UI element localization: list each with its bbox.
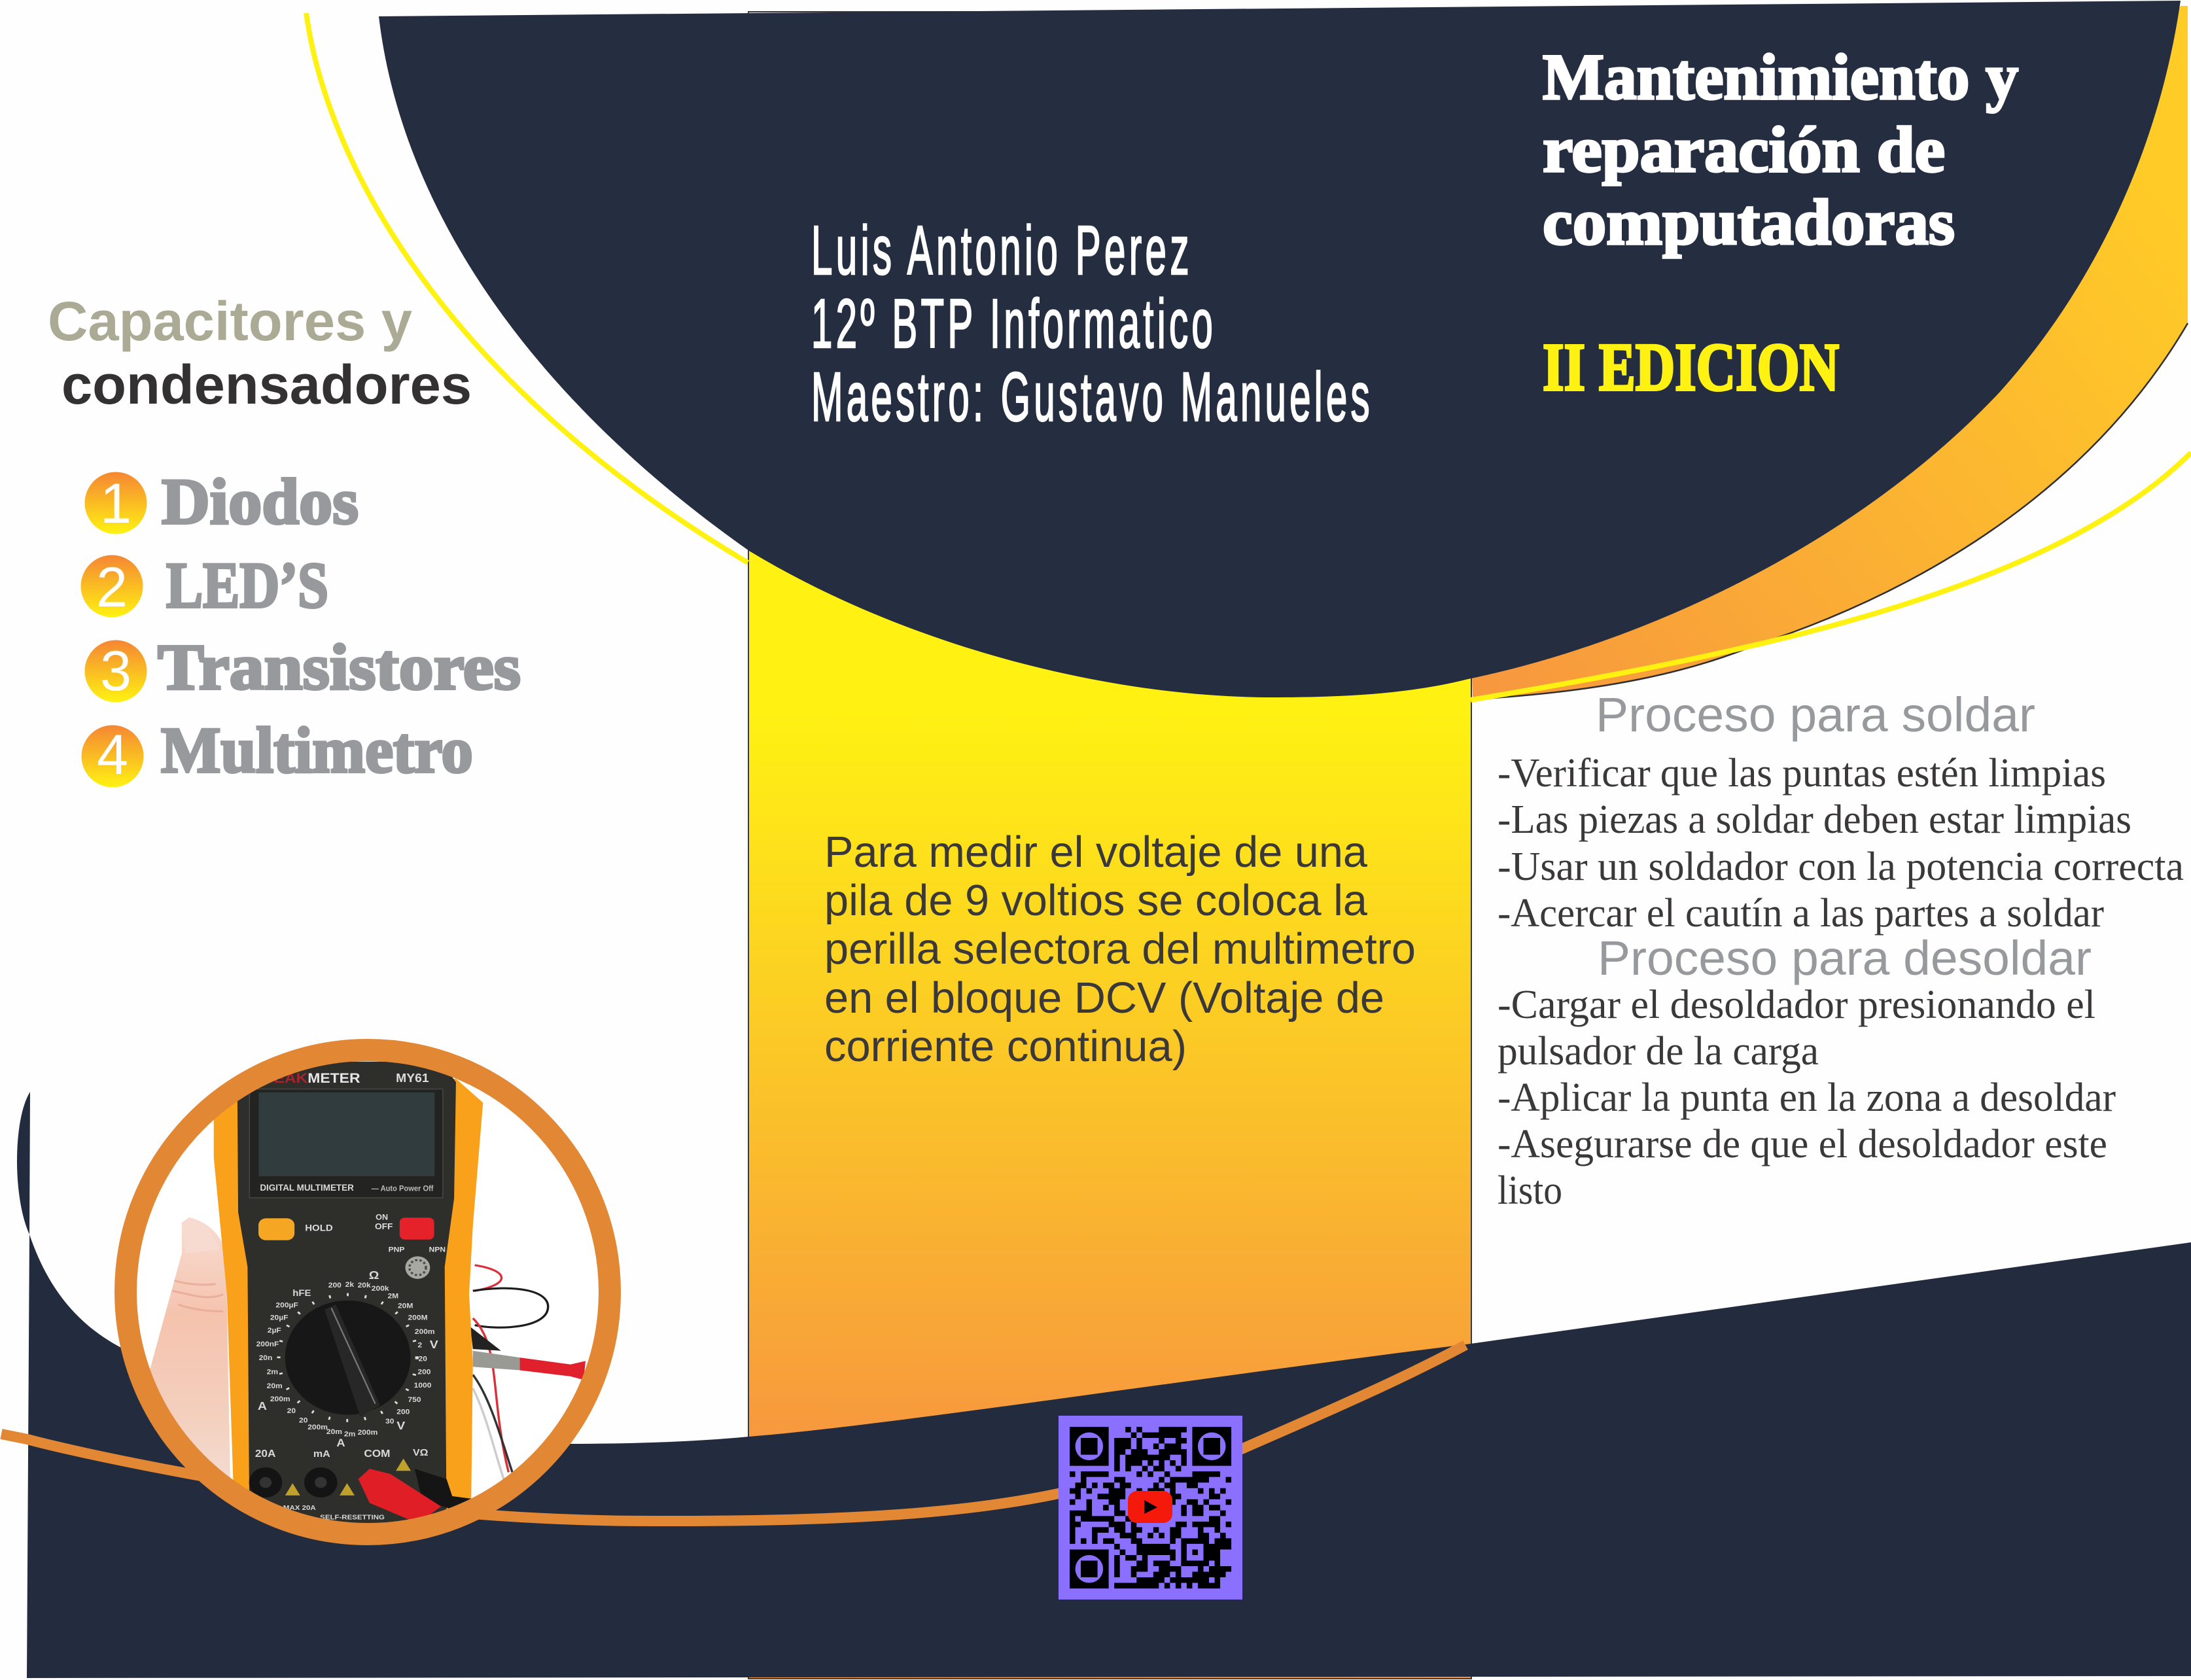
list item 2: LED'S: LED’S [166,549,328,621]
brand label: EAK [274,1070,307,1086]
heading: edition label: II EDICION [1543,330,1839,405]
text block: desoldering steps [1498,983,2116,1213]
dial scale labels: 20k [358,1282,371,1289]
text block: desoldering steps: pulsador de la carga [1498,1029,1819,1074]
text block: voltage instructions: perilla selectora del multimetro [824,924,1416,973]
list item 4: Multimetro: 4 [97,724,128,786]
dial scale labels: 200µF [275,1302,298,1309]
dial scale labels: 20m [326,1428,342,1436]
dial scale labels: 2µF [268,1327,281,1335]
dial scale labels: 200nF [256,1340,279,1348]
buttons: PNP [389,1246,405,1253]
list item 1: Diodos: 1 [100,472,131,535]
text block: desoldering steps: -Asegurarse de que el desoldador este [1498,1122,2107,1166]
dial scale labels: 2m [267,1369,278,1376]
buttons: HOLD [305,1223,333,1233]
dial scale labels: 20µF [270,1314,289,1321]
dial scale labels: Ω [369,1269,379,1282]
brand label: METER [307,1070,360,1086]
list: topics [81,465,521,788]
list item 4: Multimetro: Multimetro [161,714,473,786]
terminals [249,1458,478,1524]
dial scale labels: A [258,1399,267,1412]
dial scale labels: 20 [299,1417,307,1424]
dial scale labels: 200m [415,1328,435,1336]
dial scale labels: 30 [385,1418,394,1426]
shape: bottom navy blob [27,1234,2191,1678]
dial scale labels: 200k [372,1286,389,1293]
dial scale labels: 2m [344,1431,355,1438]
dial scale labels: V [430,1338,438,1351]
dial scale labels: 20A [255,1448,276,1460]
dial scale labels: 200 [396,1409,410,1416]
list item 2: LED'S: 2 [96,556,128,619]
brand label [275,1073,429,1083]
panel: centre gradient column [748,12,1471,1679]
text block: voltage instructions: Para medir el voltaje de una [824,828,1368,877]
dial scale labels: SELF-RESETTING [320,1514,385,1521]
dial scale labels: 20 [419,1356,427,1363]
dial scale labels: mA [313,1448,330,1460]
heading: desoldering process: Proceso para desoldar [1598,931,2092,985]
title: main title: Mantenimiento y [1543,41,2018,113]
text block: voltage instructions: pila de 9 voltios se coloca la [824,876,1368,925]
buttons: ON [376,1213,388,1221]
heading: left panel title [48,290,472,415]
title: main title: reparación de [1543,113,1945,186]
line: band outer edge [1473,323,2188,699]
text block: soldering steps: -Usar un soldador con la potencia correcta [1498,845,2184,889]
text block: soldering steps: -Verificar que las puntas estén limpias [1498,751,2106,796]
buttons [258,1213,446,1279]
line: right yellow curve [1471,453,2191,700]
text block: author credits: Luis Antonio Perez [811,213,1189,290]
text block: voltage instructions: corriente continua) [824,1022,1187,1071]
dial scale labels: 2k [345,1281,355,1289]
shape: top navy header blob [379,1,2181,697]
heading: left panel title: Capacitores y [48,290,412,352]
text block: author credits: Maestro: Gustavo Manueles [811,359,1370,436]
dial scale labels: 200 [328,1282,342,1289]
dial scale labels: 20 [287,1407,296,1415]
illustration: lcd screen: DIGITAL MULTIMETER [260,1183,354,1193]
illustration: multimeter in orange ring [126,1050,610,1534]
icon: youtube play badge [1128,1491,1172,1523]
dial scale labels: A [336,1437,345,1449]
illustration: lcd screen [249,1089,443,1198]
dial scale labels [255,1269,438,1521]
illustration: meter casing [214,1079,483,1516]
dial scale labels: 750 [408,1397,421,1404]
dial scale labels: COM [364,1448,390,1460]
heading: left panel title: condensadores [61,354,472,415]
dial scale labels: 2 [417,1342,422,1349]
dial scale labels: 200m [270,1396,290,1403]
text block: voltage instructions: en el bloque DCV (Voltaje de [824,973,1384,1023]
title: main title [1543,41,2018,258]
title: main title: computadoras [1543,186,1955,258]
brand label: MY61 [396,1072,429,1085]
shape: left navy crescent [17,1092,30,1234]
dial scale labels: VΩ [413,1448,429,1458]
text block: desoldering steps: listo [1498,1168,1562,1213]
list item 3: Transistores: 3 [100,640,131,703]
dial scale labels: 20M [398,1303,413,1310]
buttons: OFF [375,1222,393,1231]
line: orange swoosh curve [1,1345,1465,1521]
illustration: lcd screen: — Auto Power Off [372,1184,434,1193]
illustration: hand [150,1217,231,1499]
dial scale labels: 200M [408,1314,428,1321]
text block: desoldering steps: -Cargar el desoldador presionando el [1498,983,2095,1027]
text block: desoldering steps: -Aplicar la punta en la zona a desoldar [1498,1076,2116,1120]
dial scale labels: hFE [292,1289,311,1299]
text block: author credits: 12º BTP Informatico [811,286,1213,363]
text block: soldering steps [1498,751,2184,936]
heading: soldering process: Proceso para soldar [1596,688,2035,742]
illustration: test leads [470,1265,586,1482]
shape: orange swoosh band [1472,6,2188,699]
illustration: meter face [237,1062,456,1524]
qr code with youtube badge [1059,1416,1242,1600]
text block: soldering steps: -Las piezas a soldar deben estar limpias [1498,797,2131,842]
buttons: NPN [429,1246,446,1253]
dial scale labels: 1000 [414,1382,431,1390]
text block: soldering steps: -Acercar el cautín a las partes a soldar [1498,891,2104,936]
dial scale labels: 20m [267,1383,283,1390]
text block: author credits [811,213,1370,436]
text block: voltage instructions [824,828,1416,1071]
dial scale labels: MAX 20A [283,1504,316,1512]
dial scale labels: 200 [417,1369,431,1376]
rotary dial [279,1295,417,1420]
list item 3: Transistores: Transistores [158,631,521,703]
dial scale labels: V [396,1419,406,1432]
dial scale labels: 2M [387,1293,398,1301]
line: left yellow curve [306,13,748,563]
dial scale labels: 20n [259,1354,272,1362]
list item 2: LED'S [81,549,328,621]
dial scale labels: 200m [307,1424,328,1431]
list item 1: Diodos: Diodos [162,465,359,538]
dial scale labels: 200m [358,1429,377,1437]
